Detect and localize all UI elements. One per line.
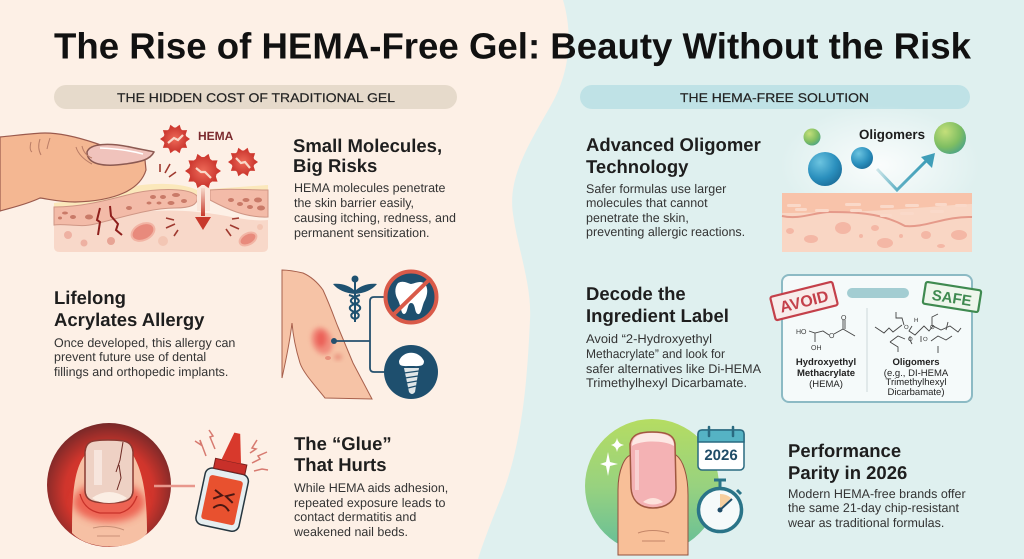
oligomers caption: Dicarbamate): [887, 387, 945, 398]
text: lifelong allergy: fillings and orthopedic implants.: [54, 365, 228, 379]
text: lifelong allergy: Once developed, this allergy can: [54, 336, 235, 350]
icon: dental implant: [384, 345, 438, 399]
text: performance parity: the same 21-day chip-resistant: [788, 501, 959, 515]
text: advanced oligomer: Safer formulas use larger: [586, 182, 726, 196]
section header: hidden cost: [54, 85, 457, 109]
finger: [0, 133, 154, 211]
oligomer molecule: O: [904, 324, 909, 331]
text: performance parity: Performance: [788, 440, 901, 461]
text: decode label: Decode the: [586, 283, 686, 304]
oligomers caption: (e.g., DI-HEMA: [884, 368, 949, 379]
text: advanced oligomer: Technology: [586, 156, 689, 177]
illustration: ingredient label card: [770, 275, 981, 402]
text: the glue: [293, 433, 448, 539]
finger: [72, 445, 147, 547]
text: advanced oligomer: molecules that cannot: [586, 196, 708, 210]
oligomers caption: Trimethylhexyl: [886, 377, 946, 388]
illustration: angry glue bottle: [195, 429, 268, 533]
nail: [630, 432, 676, 508]
text: lifelong allergy: Lifelong: [54, 287, 126, 308]
nail: [85, 440, 133, 503]
HEMA caption: [796, 357, 856, 390]
text: performance parity: wear as traditional formulas.: [787, 516, 944, 530]
text: the glue: The “Glue”: [294, 433, 392, 454]
illustration: damaged nail in red circle: [47, 423, 195, 547]
oligomers label: Oligomers: [859, 127, 925, 142]
HEMA molecule: HO: [796, 329, 807, 336]
stamp: safe: SAFE: [931, 287, 973, 310]
oligomer molecule: H: [914, 317, 918, 324]
text: the glue: While HEMA aids adhesion,: [294, 481, 448, 495]
connector lines: [334, 297, 385, 372]
section header: hidden cost: THE HIDDEN COST OF TRADITIONAL GEL: [117, 91, 395, 105]
text: small molecules: HEMA molecules penetrate: [294, 181, 446, 195]
text: the glue: That Hurts: [294, 454, 386, 475]
finger: [618, 455, 688, 555]
HEMA caption: (HEMA): [809, 379, 843, 390]
oligomers caption: [884, 357, 949, 398]
arrow: [877, 153, 935, 190]
text: performance parity: [787, 440, 966, 530]
icon: calendar 2026: [698, 427, 744, 470]
icon: caduceus: [333, 276, 377, 322]
connector: [154, 485, 195, 487]
section header: HEMA-free solution: [580, 85, 970, 109]
text: small molecules: Small Molecules,: [293, 135, 442, 156]
text: the glue: repeated exposure leads to: [294, 496, 446, 510]
skin cross-section: [54, 184, 268, 252]
stamp: safe: [923, 282, 981, 312]
spheres: [804, 122, 966, 186]
title: The Rise of HEMA-Free Gel: Beauty Without the Risk: [54, 26, 972, 66]
text: decode label: Methacrylate” and look for: [586, 347, 725, 361]
HEMA label: HEMA: [198, 129, 234, 143]
text: decode label: Trimethylhexyl Dicarbamate.: [586, 376, 747, 390]
oligomers caption: Oligomers: [892, 357, 940, 368]
oligomer molecule: O: [923, 336, 928, 343]
text: small molecules: the skin barrier easily,: [294, 196, 414, 210]
down arrow: [195, 188, 211, 230]
illustration: arm rash, dental and implant: [282, 270, 438, 399]
text: decode label: Avoid “2-Hydroxyethyl: [586, 332, 712, 346]
HEMA molecule: O: [829, 333, 835, 340]
HEMA molecule: OH: [811, 345, 822, 352]
oligomer molecule: O: [930, 324, 935, 331]
text: advanced oligomer: penetrate the skin,: [586, 211, 689, 225]
text: lifelong allergy: Acrylates Allergy: [54, 309, 205, 330]
text: small molecules: permanent sensitization.: [294, 226, 430, 240]
HEMA molecule: [796, 315, 855, 352]
irritation marks: [160, 164, 239, 236]
icon: crossed-out tooth: [386, 272, 436, 322]
sparkles: [600, 438, 624, 476]
text: lifelong allergy: prevent future use of dental: [54, 350, 206, 364]
text: the glue: weakened nail beds.: [293, 525, 408, 539]
text: decode label: [586, 283, 762, 390]
text: performance parity: Modern HEMA-free brands offer: [788, 487, 966, 501]
text: performance parity: Parity in 2026: [788, 462, 907, 483]
HEMA molecule: O: [841, 315, 847, 322]
text: advanced oligomer: [586, 134, 761, 239]
rash: [308, 324, 342, 360]
stamp: avoid: AVOID: [778, 288, 830, 317]
illustration: healthy nail in green circle: [585, 419, 719, 555]
icon: stopwatch: [698, 480, 742, 532]
section header: HEMA-free solution: THE HEMA-FREE SOLUTION: [680, 91, 869, 105]
text: small molecules: [293, 135, 456, 240]
text: the glue: contact dermatitis and: [294, 510, 416, 524]
text: decode label: Ingredient Label: [586, 305, 729, 326]
icon: calendar 2026: 2026: [704, 447, 738, 464]
oligomer molecule: [875, 312, 961, 353]
arm: [282, 270, 372, 399]
text: small molecules: Big Risks: [293, 155, 377, 176]
text: advanced oligomer: preventing allergic reactions.: [586, 225, 745, 239]
illustration: oligomers bouncing off skin: [780, 105, 980, 252]
HEMA molecules: [160, 125, 258, 188]
HEMA caption: Hydroxyethyl: [796, 357, 856, 368]
HEMA caption: Methacrylate: [797, 368, 855, 379]
illustration: finger and HEMA penetrating skin: [0, 125, 268, 252]
oligomer molecule: O: [908, 336, 913, 343]
stamp: avoid: [770, 282, 838, 320]
text: lifelong allergy: [54, 287, 235, 379]
text: decode label: safer alternatives like Di-HEMA: [586, 362, 762, 376]
skin: [782, 193, 972, 252]
text: advanced oligomer: Advanced Oligomer: [586, 134, 761, 155]
irritation squiggles: [195, 430, 268, 471]
text: small molecules: causing itching, redness, and: [294, 211, 456, 225]
